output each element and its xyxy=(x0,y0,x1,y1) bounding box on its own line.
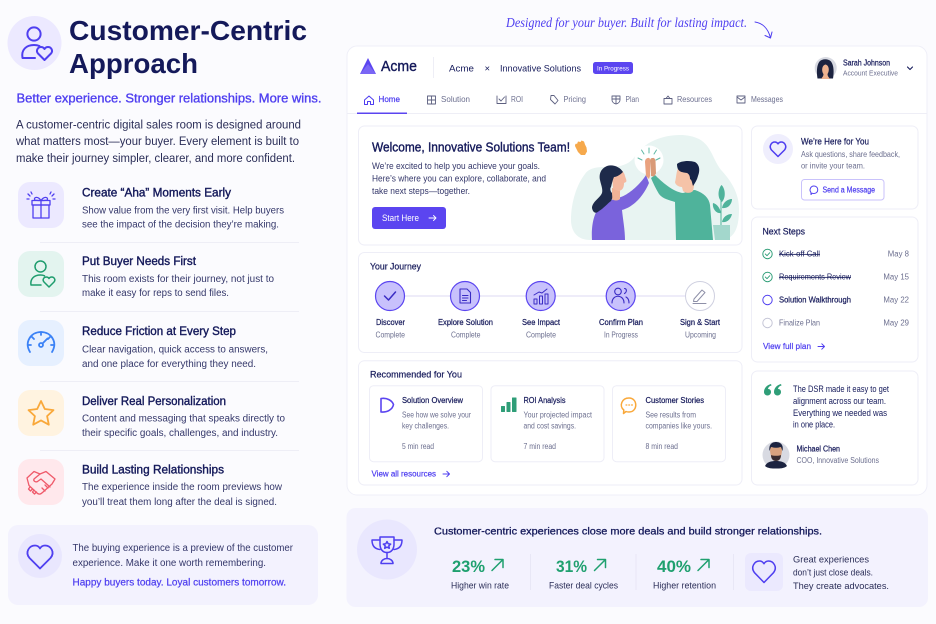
callout text: The buying experience is a preview of the customer xyxy=(72,543,294,554)
tab: ROI: ROI xyxy=(511,94,523,104)
step: Confirm Plan: In Progress xyxy=(604,330,638,340)
step: finalize plan xyxy=(763,318,909,328)
logo: Acme xyxy=(360,58,417,75)
description: Clear navigation, quick access to answers, xyxy=(82,345,268,356)
step: See Impact: Complete xyxy=(526,330,556,340)
stat: deal cycles: Faster deal cycles xyxy=(549,580,619,590)
heading: Reduce Friction at Every Step xyxy=(82,326,236,338)
icon: star xyxy=(29,401,54,425)
advocates text: They create advocates. xyxy=(793,581,889,592)
description: you’ll treat them long after the deal is signed. xyxy=(82,497,277,508)
step: requirements review xyxy=(763,272,910,282)
stat: win rate xyxy=(451,557,509,590)
icon: person with heart xyxy=(31,261,55,287)
button: Start Here xyxy=(372,207,446,229)
welcome text: Here’s where you can explore, collaborate, and xyxy=(372,174,546,184)
step: Discover: Discover xyxy=(376,318,405,327)
panel: dashboard xyxy=(347,46,927,495)
panel: recommended xyxy=(358,361,742,485)
quote text xyxy=(793,384,889,430)
icon: heart xyxy=(770,142,786,156)
partnership label xyxy=(449,64,581,74)
icon: trophy xyxy=(372,537,402,564)
callout: buying experience xyxy=(8,525,318,605)
step: Explore Solution: Complete xyxy=(451,330,480,340)
logo: Acme: Acme xyxy=(381,58,417,75)
resource: ROI Analysis: and cost savings. xyxy=(524,422,576,431)
step: Confirm Plan: Confirm Plan xyxy=(599,318,643,327)
tab: Messages xyxy=(737,94,783,104)
attribution: COO, Innovative Solutions xyxy=(796,456,879,465)
description xyxy=(82,482,283,508)
heading: Welcome, Innovative Solutions Team! xyxy=(372,140,570,154)
link: view full plan: View full plan xyxy=(763,341,811,351)
icon: heart tile xyxy=(745,553,783,591)
feature: Reduce Friction at Every Step xyxy=(18,320,268,370)
status badge xyxy=(593,62,633,74)
tab: Resources: Resources xyxy=(677,94,712,104)
description: Content and messaging that speaks directly to xyxy=(82,414,286,425)
partnership label: Acme xyxy=(449,64,474,74)
welcome text xyxy=(372,161,546,196)
account owner: Sarah Johnson xyxy=(843,58,890,68)
tab: Plan xyxy=(612,94,639,104)
heading: Put Buyer Needs First xyxy=(82,256,197,268)
header icon: person with heart xyxy=(8,16,62,70)
quote text: The DSR made it easy to get xyxy=(793,384,889,394)
plant xyxy=(713,185,732,240)
panel: here for you: or invite your team. xyxy=(801,162,865,170)
feature: Deliver Real Personalization xyxy=(18,390,286,439)
step: solution walkthrough: Solution Walkthrough xyxy=(779,296,851,305)
step: Confirm Plan xyxy=(599,282,643,340)
heading: Deliver Real Personalization xyxy=(82,396,226,408)
resource: Solution Overview xyxy=(370,386,482,462)
partnership label: × xyxy=(484,64,490,74)
icon: handshake xyxy=(27,472,55,494)
step: solution walkthrough xyxy=(763,295,909,305)
step: Explore Solution: Explore Solution xyxy=(438,318,493,327)
resource: ROI Analysis: Your projected impact xyxy=(524,411,593,420)
tab: Messages: Messages xyxy=(751,94,783,104)
resource: Solution Overview: 5 min read xyxy=(402,442,434,451)
partnership label: Innovative Solutions xyxy=(500,64,581,74)
step: requirements review: Requirements Review xyxy=(779,273,851,282)
tab: Resources xyxy=(664,94,712,104)
step: finalize plan: Finalize Plan xyxy=(779,319,820,328)
advocates text: don’t just close deals. xyxy=(793,568,873,579)
heading: Your Journey xyxy=(370,261,421,272)
tab: ROI xyxy=(497,94,523,104)
callout text: Happy buyers today. Loyal customers tomorrow. xyxy=(72,578,286,589)
resource: Customer Stories: See results from xyxy=(646,411,696,420)
icon: heart xyxy=(27,546,53,568)
callout text xyxy=(72,543,294,589)
description: This room exists for their journey, not just to xyxy=(82,274,275,285)
tab: Solution: Solution xyxy=(441,94,470,104)
icon: waving hand xyxy=(575,140,587,155)
button: send a message xyxy=(802,180,884,200)
account owner xyxy=(843,58,898,78)
man xyxy=(650,158,713,240)
panel: here for you: We’re Here for You xyxy=(801,136,869,146)
intro paragraph: A customer-centric digital sales room is designed around xyxy=(16,118,301,132)
icon: gift xyxy=(27,192,55,218)
panel: your journey xyxy=(358,252,742,352)
step: See Impact xyxy=(522,282,561,340)
arrow: curved pointer to dashboard xyxy=(755,22,772,38)
description: see the impact of the decision they’re making. xyxy=(82,220,279,230)
link: view all resources: View all resources xyxy=(372,469,436,479)
resource: Customer Stories xyxy=(612,386,726,462)
button: send a message: Send a Message xyxy=(822,186,875,194)
resource: ROI Analysis: 7 min read xyxy=(524,442,556,451)
navigation tabs xyxy=(364,94,783,104)
feature: Create Aha Moments Early xyxy=(18,182,284,230)
step: Sign and Start xyxy=(680,282,721,340)
attribution: Michael Chen xyxy=(796,445,840,454)
description: The experience inside the room previews how xyxy=(82,482,283,493)
panel: next steps xyxy=(752,217,918,362)
icon: gauge xyxy=(28,332,54,352)
step: Discover: Complete xyxy=(376,330,405,340)
description: Show value from the very first visit. Help buyers xyxy=(82,206,284,216)
resource: ROI Analysis xyxy=(491,386,604,462)
tab: Home: Home xyxy=(378,94,400,104)
description: and one place for everything they need. xyxy=(82,359,256,370)
panel: welcome xyxy=(358,126,742,245)
tab: Pricing xyxy=(550,94,586,104)
title: Customer-Centric xyxy=(69,15,307,46)
quote text: alignment across our team. xyxy=(793,396,886,406)
step: Discover xyxy=(376,282,405,340)
description xyxy=(82,206,284,230)
illustration: high five xyxy=(571,135,739,240)
step: kick-off call xyxy=(763,249,909,259)
step: kick-off call: Kick-off Call xyxy=(779,250,820,259)
description xyxy=(82,414,286,439)
panel: here for you: Ask questions, share feedback, xyxy=(801,150,900,159)
step: Sign and Start: Sign & Start xyxy=(680,318,721,327)
handwritten tagline: Designed for your buyer. Built for lasting impact. xyxy=(505,16,747,31)
panel: here for you xyxy=(752,126,918,209)
step: solution walkthrough: May 22 xyxy=(883,296,909,305)
stat: win rate: Higher win rate xyxy=(451,580,509,590)
avatar: Michael Chen xyxy=(762,442,790,468)
title xyxy=(69,15,307,79)
banner headline: Customer-centric experiences close more deals and build stronger relationships. xyxy=(434,525,822,537)
advocates text: Great experiences xyxy=(793,555,869,566)
description xyxy=(82,274,275,299)
advocates text xyxy=(793,555,889,592)
subtitle: Better experience. Stronger relationships. More wins. xyxy=(16,90,322,106)
tab: Solution xyxy=(428,94,470,104)
resource: Solution Overview: See how we solve your xyxy=(402,411,471,420)
panel: testimonial xyxy=(752,371,918,485)
stat: deal cycles: 31% xyxy=(556,557,587,576)
resource: Customer Stories: companies like yours. xyxy=(646,422,712,431)
title: Approach xyxy=(69,48,198,79)
quote text: Everything we needed was xyxy=(793,408,888,418)
intro paragraph: make their journey simpler, clearer, and more confident. xyxy=(16,151,295,165)
icon: chevron xyxy=(908,67,912,70)
stat: retention: 40% xyxy=(657,557,691,576)
heading: Build Lasting Relationships xyxy=(82,464,224,476)
woman xyxy=(592,158,650,240)
feature: Put Buyer Needs First xyxy=(18,251,275,299)
heading: Create “Aha” Moments Early xyxy=(82,188,231,200)
heading: Next Steps xyxy=(762,226,805,236)
tab: Plan: Plan xyxy=(626,94,639,104)
step: finalize plan: May 29 xyxy=(883,319,909,328)
tab: Pricing: Pricing xyxy=(564,94,586,104)
description: their specific goals, challenges, and industry. xyxy=(82,428,278,439)
quote text: in one place. xyxy=(793,420,835,430)
button: Start Here: Start Here xyxy=(382,213,419,223)
tab: Home xyxy=(364,94,400,104)
attribution xyxy=(796,445,879,465)
feature: Build Lasting Relationships xyxy=(18,459,283,508)
step: Sign and Start: Upcoming xyxy=(685,330,716,340)
intro paragraph: what matters most—your buyer. Every element is built to xyxy=(15,134,299,148)
callout text: experience. Make it one worth remembering. xyxy=(72,558,266,569)
description xyxy=(82,345,268,370)
account owner: Account Executive xyxy=(843,69,898,78)
step: kick-off call: May 8 xyxy=(888,250,909,259)
stat: deal cycles xyxy=(549,557,619,590)
stat: retention: Higher retention xyxy=(653,580,716,590)
step: Explore Solution xyxy=(438,282,493,340)
resource: Solution Overview: Solution Overview xyxy=(402,396,463,405)
welcome text: We’re excited to help you achieve your goals. xyxy=(372,161,540,171)
resource: ROI Analysis: ROI Analysis xyxy=(524,396,566,405)
stat: retention xyxy=(653,557,716,590)
stat: win rate: 23% xyxy=(452,557,485,576)
heading: Recommended for You xyxy=(370,369,462,380)
resource: Customer Stories: Customer Stories xyxy=(646,396,704,405)
status badge: In Progress xyxy=(597,66,630,72)
avatar: Sarah Johnson xyxy=(815,57,837,79)
description: make it easy for reps to send files. xyxy=(82,288,229,299)
icon: quote mark xyxy=(764,384,782,396)
welcome text: take next steps—together. xyxy=(372,186,470,196)
step: requirements review: May 15 xyxy=(883,273,910,282)
panel: results banner xyxy=(346,508,928,607)
step: See Impact: See Impact xyxy=(522,318,561,327)
intro paragraph xyxy=(15,118,301,165)
resource: Customer Stories: 8 min read xyxy=(646,442,678,451)
resource: Solution Overview: key challenges. xyxy=(402,422,449,431)
